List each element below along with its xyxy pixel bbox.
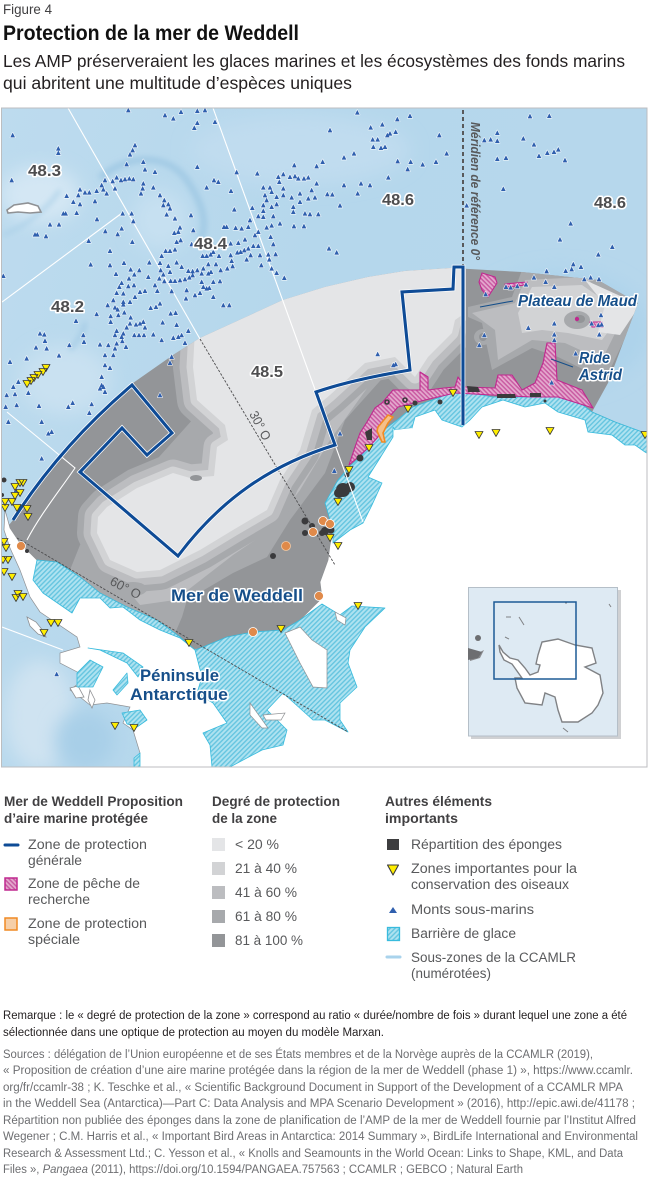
legend heading: Degré de protection — [212, 794, 340, 809]
sources — [3, 1048, 638, 1176]
sources: Sources : délégation de l’Union européenne et de ses États membres et de la Norvège auprès de la CCAMLR (2019), — [3, 1048, 593, 1061]
zone numbers: 48.5 — [251, 364, 283, 381]
prime meridian — [462, 110, 464, 267]
place names: Astrid — [578, 367, 622, 384]
subtitle: Les AMP préserveraient les glaces marines et les écosystèmes des fonds marins — [3, 51, 625, 71]
label: CCAMLR subzones: Sous-zones de la CCAMLR — [411, 950, 576, 965]
label: special protection zone: Zone de protection — [28, 916, 147, 931]
label: bird areas — [411, 861, 578, 892]
note — [3, 1010, 627, 1039]
place names: Ride — [579, 350, 610, 367]
ice shelf: George VI — [113, 673, 128, 695]
ice shelves — [33, 390, 650, 767]
label: bird areas: Zones importantes pour la — [411, 861, 578, 876]
sources: Files », Pangaea (2011), https://doi.org/10.1594/PANGAEA.757563 ; CCAMLR ; GEBCO ; Natural Earth — [3, 1164, 523, 1176]
protection zone outline — [13, 267, 463, 556]
meridian labels: 30° O — [246, 408, 274, 443]
legend heading — [212, 794, 340, 826]
subtitle — [3, 51, 625, 93]
ice shelf: east coast — [325, 390, 650, 543]
subtitle: qui abritent une multitude d’espèces uniques — [3, 73, 352, 93]
ocean background — [0, 108, 650, 770]
ice shelf: Wordie — [77, 660, 103, 687]
figure label: Figure 4 — [3, 1, 52, 17]
ice shelf: Filchner-Ronne — [195, 604, 385, 767]
meridian labels: 60° O — [108, 573, 144, 602]
meridian labels: Méridien de référence 0° — [468, 122, 483, 261]
sources: org/fr/ccamlr-38 ; K. Teschke et al., « Scientific Background Document in Support of the Development of a CCAMLR MPA — [3, 1082, 623, 1094]
place names: Péninsule — [140, 666, 219, 685]
zone numbers: 48.6 — [382, 192, 414, 209]
protection degree raster — [10, 268, 638, 649]
swatch labels: 61 à 80 % — [235, 909, 297, 924]
sponges — [0, 386, 546, 559]
label: ice shelf: Barrière de glace — [411, 926, 516, 941]
label: bird areas: conservation des oiseaux — [411, 877, 569, 892]
panel: map — [0, 108, 650, 770]
label: special protection zone: spéciale — [28, 932, 80, 947]
swatch: sponges — [387, 839, 399, 850]
map frame — [2, 108, 647, 767]
place names: Antarctique — [130, 685, 228, 704]
swatch labels: < 20 % — [235, 837, 279, 852]
legend heading: Autres éléments — [385, 794, 492, 809]
zone numbers: 48.4 — [194, 236, 227, 253]
place names: Mer de Weddell — [171, 586, 303, 605]
meridian labels — [108, 122, 483, 602]
research zone: Maud Rise — [479, 273, 497, 297]
ice rises — [250, 428, 412, 728]
label: research fishing zone — [28, 876, 140, 907]
legend: other elements — [385, 794, 578, 981]
orange special zones — [16, 516, 334, 636]
swatch: ice shelf — [388, 928, 400, 940]
swatch: special protection zone — [5, 918, 17, 930]
title: Protection de la mer de Weddell — [3, 22, 299, 45]
legend: protection degree — [212, 794, 340, 948]
legend heading — [4, 794, 183, 826]
label: CCAMLR subzones: (numérotées) — [411, 966, 491, 981]
east protection contours — [468, 270, 640, 380]
place names — [130, 293, 638, 704]
zone numbers: 48.2 — [51, 299, 84, 316]
land — [4, 390, 650, 767]
central protection contours — [97, 260, 465, 596]
zone numbers: 48.3 — [28, 163, 61, 180]
legend heading: de la zone — [212, 811, 277, 826]
ice shelf: peninsula — [88, 648, 143, 677]
label: CCAMLR subzones — [411, 950, 576, 981]
legend heading: importants — [385, 811, 458, 826]
south protection contours — [70, 380, 380, 632]
legend: proposed MPA — [4, 794, 183, 947]
swatch: seamounts — [389, 907, 397, 913]
note: Remarque : le « degré de protection de la zone » correspond au ratio « durée/nombre de fois » durant lequel une zone a été — [3, 1010, 627, 1022]
legend heading: d’aire marine protégée — [4, 811, 148, 826]
special protection zone — [377, 415, 393, 442]
label: seamounts: Monts sous-marins — [411, 902, 534, 917]
seamounts east — [325, 110, 615, 473]
inset Antarctica — [499, 639, 603, 722]
research fishing zones — [349, 273, 603, 465]
label: general protection zone — [28, 837, 147, 868]
islands — [7, 203, 95, 708]
subzone boundaries — [2, 108, 363, 650]
sources: Wegener ; C.M. Harris et al., « Important Bird Areas in Antarctica: 2014 Summary », BirdLife International and Environmental — [3, 1131, 638, 1143]
zone numbers: 48.6 — [594, 195, 626, 212]
important bird areas — [0, 364, 649, 732]
label: general protection zone: générale — [28, 853, 82, 868]
sources: Répartition non publiée des éponges dans la zone de planification de l’AMP de la mer de Weddell fournie par l’Institut Alfred — [3, 1115, 636, 1127]
swatch labels: 81 à 100 % — [235, 933, 303, 948]
swatch labels — [235, 837, 303, 948]
place names: Plateau de Maud — [518, 293, 638, 310]
swatch labels: 21 à 40 % — [235, 861, 297, 876]
legend heading: Mer de Weddell Proposition — [4, 794, 183, 809]
swatches — [212, 838, 225, 947]
research zone: coast — [349, 343, 593, 465]
swatch: research fishing zone — [5, 878, 17, 890]
swatch: general protection zone — [5, 844, 18, 846]
label: sponges: Répartition des éponges — [411, 837, 562, 852]
sources: Research & Assessment Ltd.; C. Yesson et al., « Knolls and Seamounts in the World Ocean: Links to Shape, KML, and Data — [3, 1148, 624, 1160]
swatch labels: 41 à 60 % — [235, 885, 297, 900]
dashed meridians — [17, 339, 348, 732]
note: sélectionnée dans une optique de protection au moyen du modèle Marxan. — [3, 1027, 384, 1039]
label: general protection zone: Zone de protection — [28, 837, 147, 852]
sources: « Proposition de création d’une aire marine protégée dans la région de la mer de Weddell (phase 1) », https://www.ccamlr. — [3, 1065, 633, 1077]
swatch: CCAMLR subzones — [387, 956, 400, 958]
zone numbers — [28, 163, 626, 381]
swatch: bird areas — [388, 865, 398, 875]
label: research fishing zone: recherche — [28, 892, 90, 907]
label: research fishing zone: Zone de pêche de — [28, 876, 140, 891]
legend heading — [385, 794, 492, 826]
seamounts west — [1, 108, 325, 676]
ice shelf: Larsen — [33, 560, 195, 650]
inset locator map — [468, 588, 621, 739]
label: special protection zone — [28, 916, 147, 947]
ice shelf: Wilkins — [122, 710, 147, 727]
sources: in the Weddell Sea (Antarctica)—Part C: Data Analysis and MPA Scenario Development » (2016), http://epic.awi.de/41178 ; — [3, 1098, 635, 1110]
